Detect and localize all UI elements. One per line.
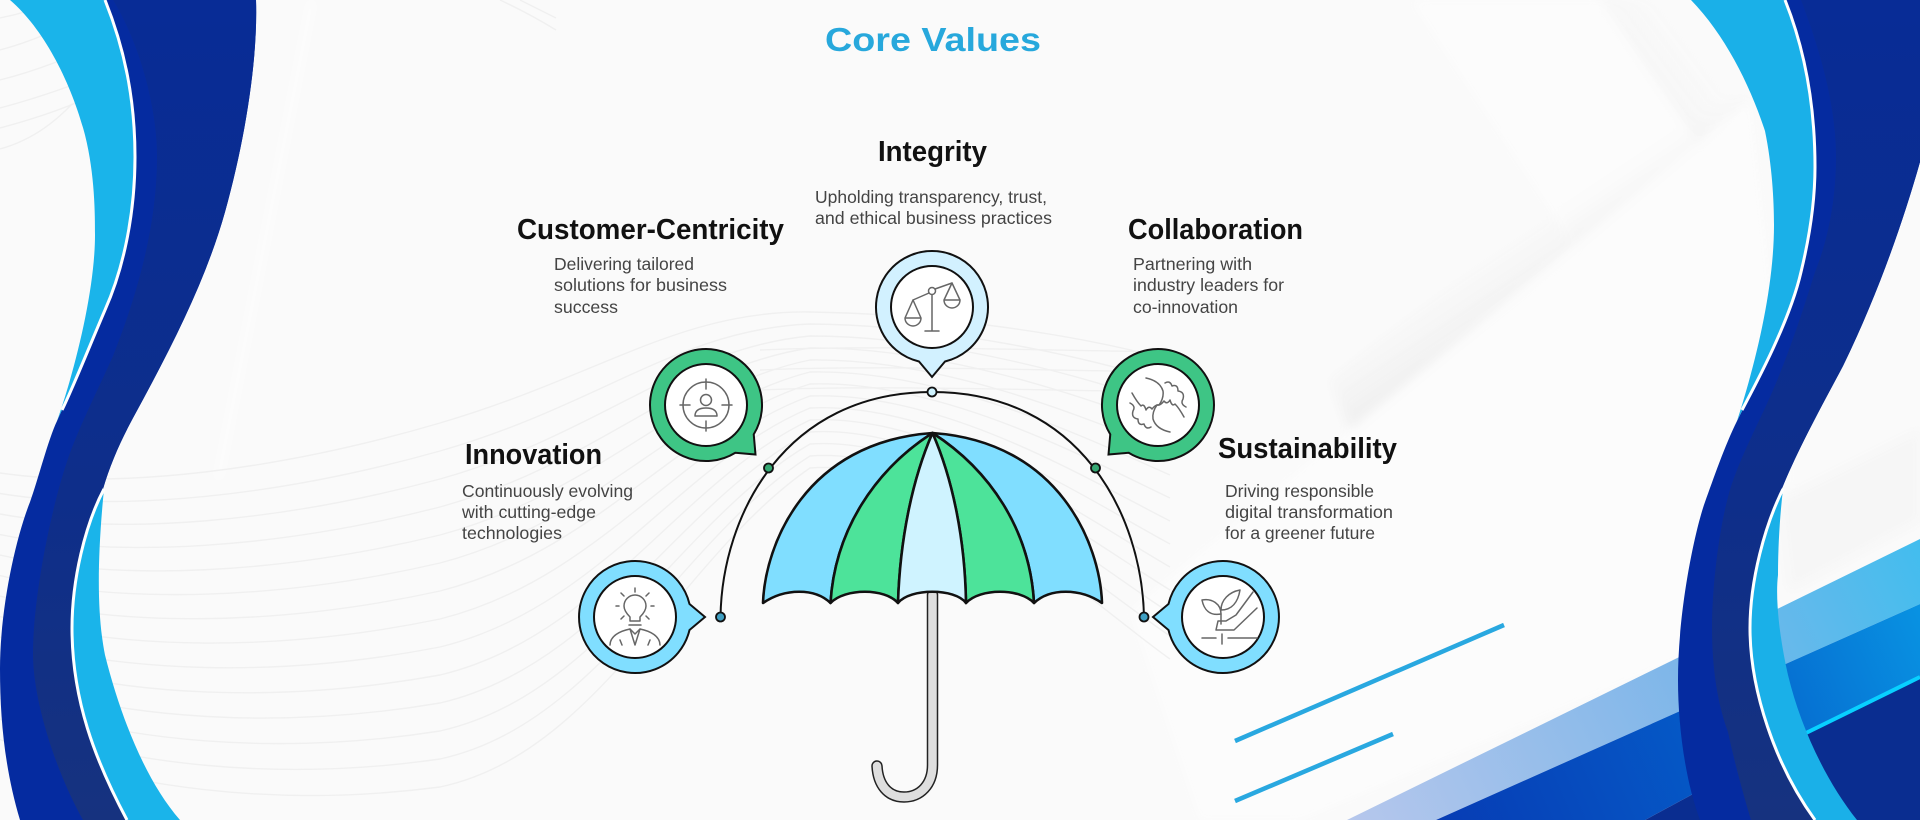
bubble: Customer-Centricity — [627, 326, 795, 494]
icon: clasped hands — [1130, 378, 1186, 432]
description: Sustainability: digital transformation — [1225, 502, 1393, 522]
title: Core Values — [825, 21, 1041, 58]
connector arc with nodes — [716, 388, 1148, 622]
umbrella handle — [877, 595, 932, 797]
description: Integrity — [815, 187, 1052, 228]
icon: target person — [680, 379, 732, 431]
description: Sustainability: for a greener future — [1225, 523, 1375, 543]
description: Innovation: with cutting-edge — [461, 502, 596, 522]
item: Customer-Centricity — [517, 214, 795, 494]
description: Customer-Centricity — [554, 254, 727, 317]
description: Customer-Centricity: Delivering tailored — [554, 254, 694, 274]
item: Innovation — [461, 439, 705, 673]
description: Sustainability — [1225, 481, 1393, 543]
heading: Customer-Centricity: Customer-Centricity — [517, 214, 784, 246]
description: Collaboration — [1133, 254, 1284, 317]
umbrella canopy — [763, 433, 1102, 603]
heading: Collaboration: Collaboration — [1128, 214, 1303, 246]
description: Innovation — [461, 481, 633, 543]
icon: balance scale — [905, 283, 960, 331]
description: Customer-Centricity: solutions for business — [554, 275, 727, 295]
description: Innovation: technologies — [462, 523, 562, 543]
icon: plant in hand — [1202, 590, 1257, 644]
description: Customer-Centricity: success — [554, 297, 618, 317]
right blue swirl — [1678, 0, 1920, 820]
item: Sustainability — [1153, 433, 1397, 673]
description: Collaboration: co-innovation — [1133, 297, 1238, 317]
description: Collaboration: industry leaders for — [1133, 275, 1284, 295]
bottom-right diagonal stripes — [1347, 539, 1920, 820]
description: Collaboration: Partnering with — [1133, 254, 1252, 274]
bubble: Collaboration — [1069, 326, 1237, 494]
description: Sustainability: Driving responsible — [1225, 481, 1374, 501]
bubble: Innovation — [579, 561, 705, 673]
heading: Sustainability: Sustainability — [1218, 433, 1397, 465]
heading: Integrity: Integrity — [878, 136, 987, 168]
item: Integrity — [815, 136, 1052, 377]
description: Innovation: Continuously evolving — [462, 481, 633, 501]
bubble: Integrity — [876, 251, 988, 377]
decorative accent lines — [1235, 625, 1504, 801]
description: Integrity: and ethical business practices — [815, 208, 1052, 228]
umbrella — [763, 433, 1102, 797]
description: Integrity: Upholding transparency, trust, — [815, 187, 1047, 207]
bubble: Sustainability — [1153, 561, 1279, 673]
left blue swirl — [0, 0, 256, 820]
icon: bulb and person — [610, 588, 660, 645]
item: Collaboration — [1069, 214, 1303, 494]
heading: Innovation: Innovation — [465, 439, 602, 471]
